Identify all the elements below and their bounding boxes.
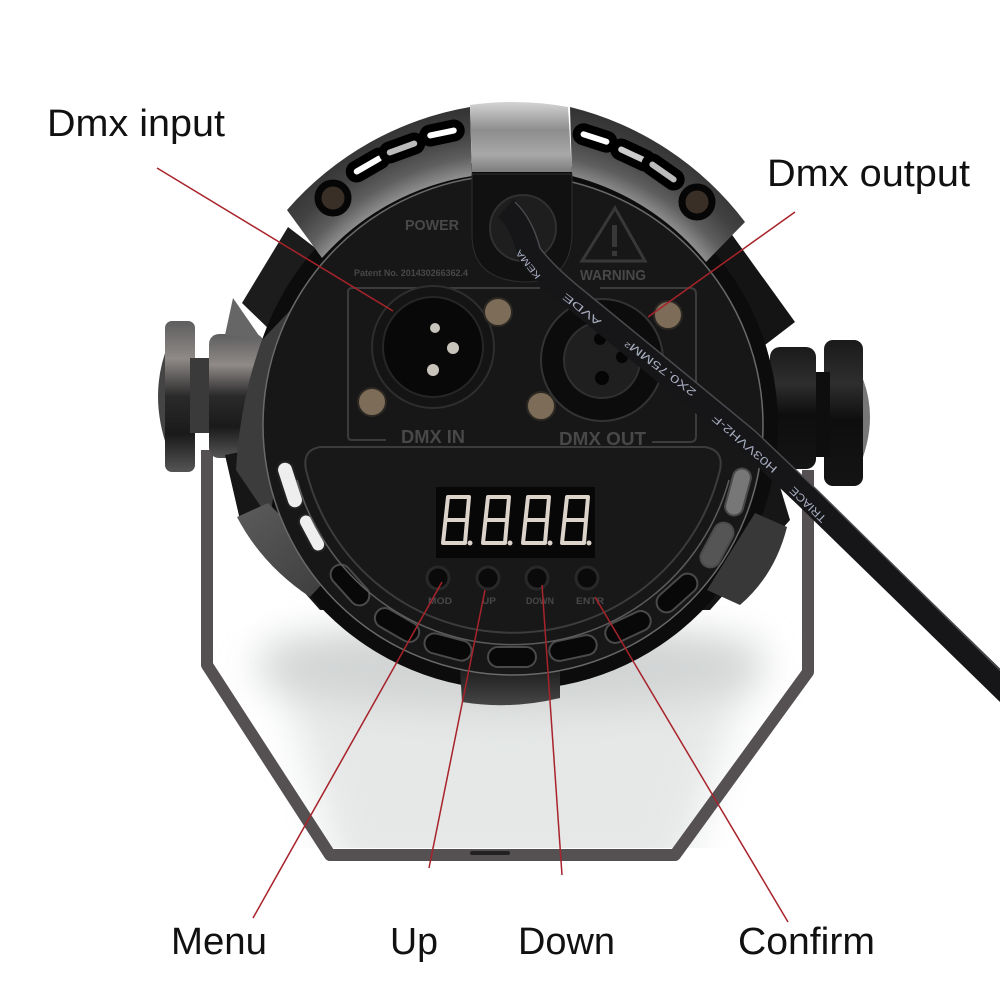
left side housing — [242, 227, 322, 333]
panel screws — [358, 298, 682, 420]
floor shadow inside bracket — [255, 626, 765, 880]
right side housing — [702, 232, 795, 345]
DMX IN label: DMX IN — [401, 427, 465, 447]
callout line: Confirm — [595, 597, 788, 922]
power label: POWER — [405, 217, 459, 234]
power cable: 2X0.75MM² — [623, 337, 699, 398]
callout line: Menu — [253, 582, 442, 918]
rear plate — [263, 175, 763, 675]
label: Confirm: Confirm — [738, 921, 875, 963]
DMX OUT label: DMX OUT — [559, 429, 646, 449]
button captions: UP — [482, 596, 496, 606]
control buttons — [427, 567, 598, 589]
connector panel outline — [348, 288, 696, 442]
power cable: AVDE — [560, 290, 604, 327]
power cable — [506, 202, 1000, 695]
label: Dmx input: Dmx input — [47, 103, 225, 145]
label: Menu: Menu — [171, 921, 267, 963]
control panel — [297, 447, 729, 645]
lamp body — [225, 102, 795, 705]
left adjustment knob — [158, 321, 264, 472]
callout line: Down — [542, 585, 562, 875]
power cable: KEMA — [514, 248, 543, 281]
button captions: ENTR — [576, 596, 605, 606]
four digit display — [436, 487, 595, 558]
warning triangle — [580, 208, 646, 284]
ring screws — [318, 183, 712, 217]
button captions — [428, 596, 605, 606]
top grey block — [470, 102, 572, 172]
label: Up: Up — [390, 921, 438, 963]
top vented band right — [570, 107, 745, 262]
label: Down: Down — [518, 921, 615, 963]
bottom tab — [460, 668, 560, 705]
mounting bracket — [207, 450, 808, 855]
power cable: TRIACE — [788, 484, 829, 524]
power socket housing — [472, 174, 572, 282]
side rim — [236, 300, 300, 520]
DMX in connector — [372, 286, 494, 408]
left small tab — [225, 298, 262, 340]
power cable: H03VVH2-F — [710, 412, 780, 475]
top vented band left — [287, 107, 472, 258]
warning triangle: WARNING — [580, 267, 646, 284]
callout line: Dmx output — [648, 212, 795, 317]
button captions: MOD — [428, 596, 453, 606]
label: Dmx output: Dmx output — [767, 153, 970, 195]
callout line: Dmx input — [157, 168, 393, 311]
button captions: DOWN — [526, 596, 554, 606]
DMX out connector — [541, 299, 663, 421]
lower left tab — [237, 503, 335, 597]
patent label: Patent No. 201430266362.4 — [354, 268, 468, 278]
lower right tab — [707, 513, 787, 605]
vent slots — [275, 122, 753, 667]
body disc — [248, 160, 778, 690]
callout line: Up — [429, 590, 485, 868]
right adjustment knob — [770, 340, 870, 486]
lower side housing fill — [225, 400, 790, 610]
